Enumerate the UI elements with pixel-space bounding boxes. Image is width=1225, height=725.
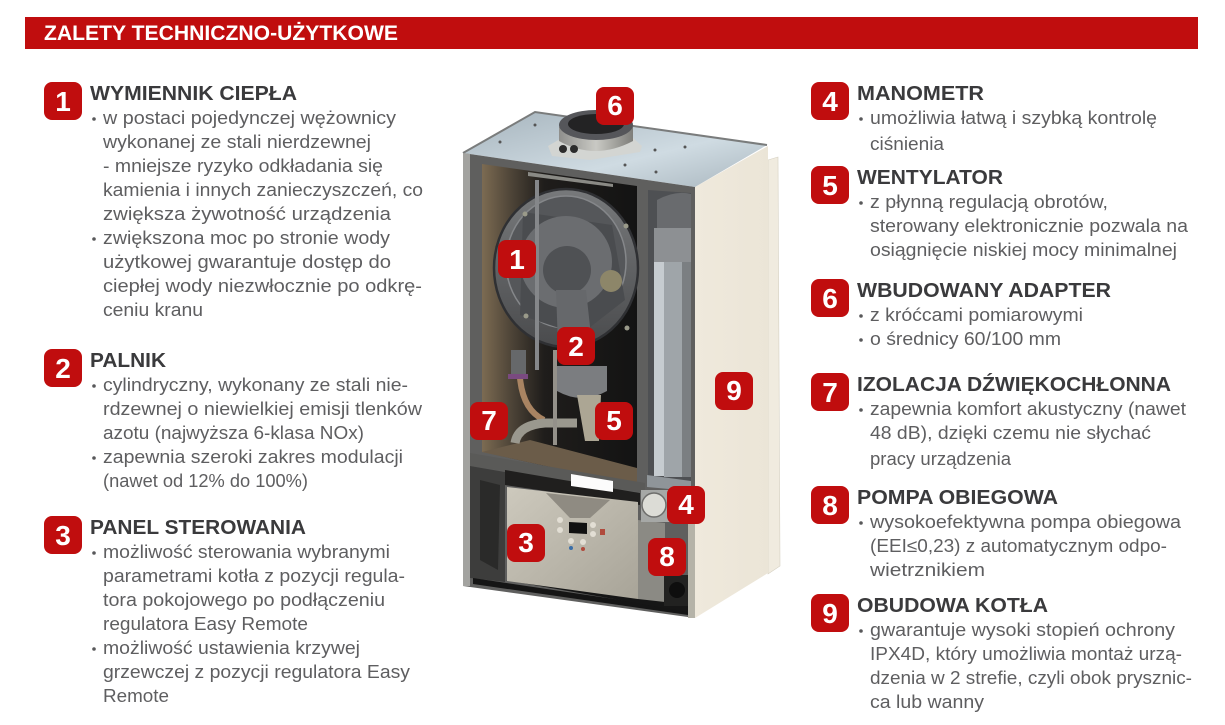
body text 8 — [859, 512, 1182, 580]
body text 5: osiągnięcie niskiej mocy minimalnej — [870, 240, 1177, 260]
body text 2: azotu (najwyższa 6-klasa NOx) — [103, 423, 364, 443]
right compartment fan housing — [647, 193, 691, 491]
section 2: palnik — [44, 349, 423, 491]
badge 2: 2 — [55, 353, 71, 384]
pressure gauge — [641, 490, 671, 522]
body text 2: (nawet od 12% do 100%) — [103, 471, 308, 491]
body text 1 — [92, 108, 423, 320]
body text 3: regulatora Easy Remote — [103, 614, 308, 634]
heading 1: WYMIENNIK CIEPŁA — [90, 82, 297, 105]
body text 1: w postaci pojedynczej wężownicy — [102, 108, 396, 128]
body text 1: wykonanej ze stali nierdzewnej — [102, 132, 371, 152]
body text 7: zapewnia komfort akustyczny (nawet — [870, 399, 1186, 419]
right frame post — [688, 500, 695, 618]
body text 4 — [859, 108, 1157, 154]
body text 9 — [859, 620, 1192, 712]
body text 2: zapewnia szeroki zakres modulacji — [103, 447, 403, 467]
image marker 1: 1 — [509, 244, 525, 275]
title banner: ZALETY TECHNICZNO-UŻYTKOWE — [44, 22, 398, 45]
badge 4: 4 — [822, 86, 838, 117]
badge 9 — [811, 594, 849, 632]
title banner — [25, 17, 1198, 49]
image marker 3: 3 — [518, 527, 534, 558]
badge 6 — [811, 279, 849, 317]
body text 9: gwarantuje wysoki stopień ochrony — [870, 620, 1175, 640]
boiler side casing — [695, 146, 780, 618]
body text 4: umożliwia łatwą i szybką kontrolę — [870, 108, 1157, 128]
boiler top plate — [463, 112, 767, 187]
body text 3: tora pokojowego po podłączeniu — [103, 590, 385, 610]
control panel — [507, 487, 665, 602]
section 6: wbudowany adapter — [811, 279, 1111, 349]
image marker 8 — [648, 538, 686, 576]
badge 8 — [811, 486, 849, 524]
body text 8: wysokoefektywna pompa obiegowa — [869, 512, 1182, 532]
image marker 8: 8 — [659, 541, 675, 572]
heading 9: OBUDOWA KOTŁA — [857, 594, 1048, 617]
heading 8: POMPA OBIEGOWA — [857, 486, 1058, 509]
section 8: pompa obiegowa — [811, 486, 1182, 580]
body text 1: ciepłej wody niezwłocznie po odkrę- — [103, 276, 422, 296]
section 1: wymiennik ciepła — [44, 82, 423, 320]
body text 5: z płynną regulacją obrotów, — [870, 192, 1108, 212]
body text 9: ca lub wanny — [870, 692, 984, 712]
image marker 7: 7 — [481, 405, 497, 436]
heading 6: WBUDOWANY ADAPTER — [857, 279, 1111, 302]
heading 3: PANEL STEROWANIA — [90, 516, 306, 539]
badge 1 — [44, 82, 82, 120]
badge 6: 6 — [822, 283, 838, 314]
image marker 5: 5 — [606, 405, 622, 436]
flue adapter — [548, 110, 642, 160]
heading 5: WENTYLATOR — [857, 166, 1003, 189]
badge 3: 3 — [55, 520, 71, 551]
heading 2: PALNIK — [90, 349, 166, 372]
body text 3: grzewczej z pozycji regulatora Easy — [103, 662, 410, 682]
body text 5: sterowany elektronicznie pozwala na — [870, 216, 1189, 236]
badge 1: 1 — [55, 86, 71, 117]
image marker 6 — [596, 87, 634, 125]
section 4: manometr — [811, 82, 1157, 154]
heat exchanger — [494, 180, 638, 370]
body text 2: rdzewnej o niewielkiej emisji tlenków — [103, 399, 423, 419]
body text 7: 48 dB), dzięki czemu nie słychać — [870, 423, 1151, 443]
body text 7 — [859, 399, 1186, 469]
image marker 6: 6 — [607, 90, 623, 121]
body text 9: dzenia w 2 strefie, czyli obok prysznic- — [870, 668, 1192, 688]
heading 7: IZOLACJA DŹWIĘKOCHŁONNA — [857, 373, 1171, 396]
body text 6: o średnicy 60/100 mm — [870, 329, 1061, 349]
body text 3: Remote — [103, 686, 169, 706]
body text 1: zwiększa żywotność urządzenia — [103, 204, 392, 224]
illustration: gas boiler cutaway — [463, 87, 780, 618]
body text 8: (EEI≤0,23) z automatycznym odpo- — [870, 536, 1167, 556]
boiler front frame and interior — [463, 153, 695, 618]
body text 3: parametrami kotła z pozycji regula- — [103, 566, 405, 586]
section 9: obudowa kotła — [811, 594, 1192, 712]
badge 3 — [44, 516, 82, 554]
badge 9: 9 — [822, 598, 838, 629]
body text 4: ciśnienia — [870, 134, 945, 154]
badge 7: 7 — [822, 377, 838, 408]
image marker 2: 2 — [568, 331, 584, 362]
body text 8: wietrznikiem — [869, 560, 985, 580]
body text 7: pracy urządzenia — [870, 449, 1012, 469]
body text 1: kamienia i innych zanieczyszczeń, co — [103, 180, 423, 200]
badge 8: 8 — [822, 490, 838, 521]
badge 4 — [811, 82, 849, 120]
body text 1: ceniu kranu — [103, 300, 203, 320]
body text 3: możliwość ustawienia krzywej — [103, 638, 360, 658]
body text 2 — [92, 375, 423, 491]
body text 1: użytkowej gwarantuje dostęp do — [103, 252, 391, 272]
image marker 3 — [507, 524, 545, 562]
image marker 4: 4 — [678, 489, 694, 520]
burner and pipes — [508, 350, 607, 445]
body text 3 — [92, 542, 410, 706]
body text 1: zwiększona moc po stronie wody — [103, 228, 390, 248]
badge 5: 5 — [822, 170, 838, 201]
badge 2 — [44, 349, 82, 387]
body text 1: - mniejsze ryzyko odkładania się — [103, 156, 383, 176]
body text 5 — [859, 192, 1189, 260]
body text 2: cylindryczny, wykonany ze stali nie- — [103, 375, 408, 395]
image marker 9 — [715, 372, 753, 410]
image marker 9: 9 — [726, 375, 742, 406]
circulation pump — [664, 575, 689, 606]
badge 7 — [811, 373, 849, 411]
body text 9: IPX4D, który umożliwia montaż urzą- — [870, 644, 1182, 664]
heading 4: MANOMETR — [857, 82, 984, 105]
body text 6 — [859, 305, 1083, 349]
section 7: izolacja dźwiękochłonna — [811, 373, 1186, 469]
image marker 1 — [498, 240, 536, 278]
body text 3: możliwość sterowania wybranymi — [103, 542, 390, 562]
body text 6: z króćcami pomiarowymi — [870, 305, 1083, 325]
image marker 4 — [667, 486, 705, 524]
section 3: panel sterowania — [44, 516, 410, 706]
image marker 7 — [470, 402, 508, 440]
image marker 2 — [557, 327, 595, 365]
badge 5 — [811, 166, 849, 204]
section 5: wentylator — [811, 166, 1189, 260]
image marker 5 — [595, 402, 633, 440]
